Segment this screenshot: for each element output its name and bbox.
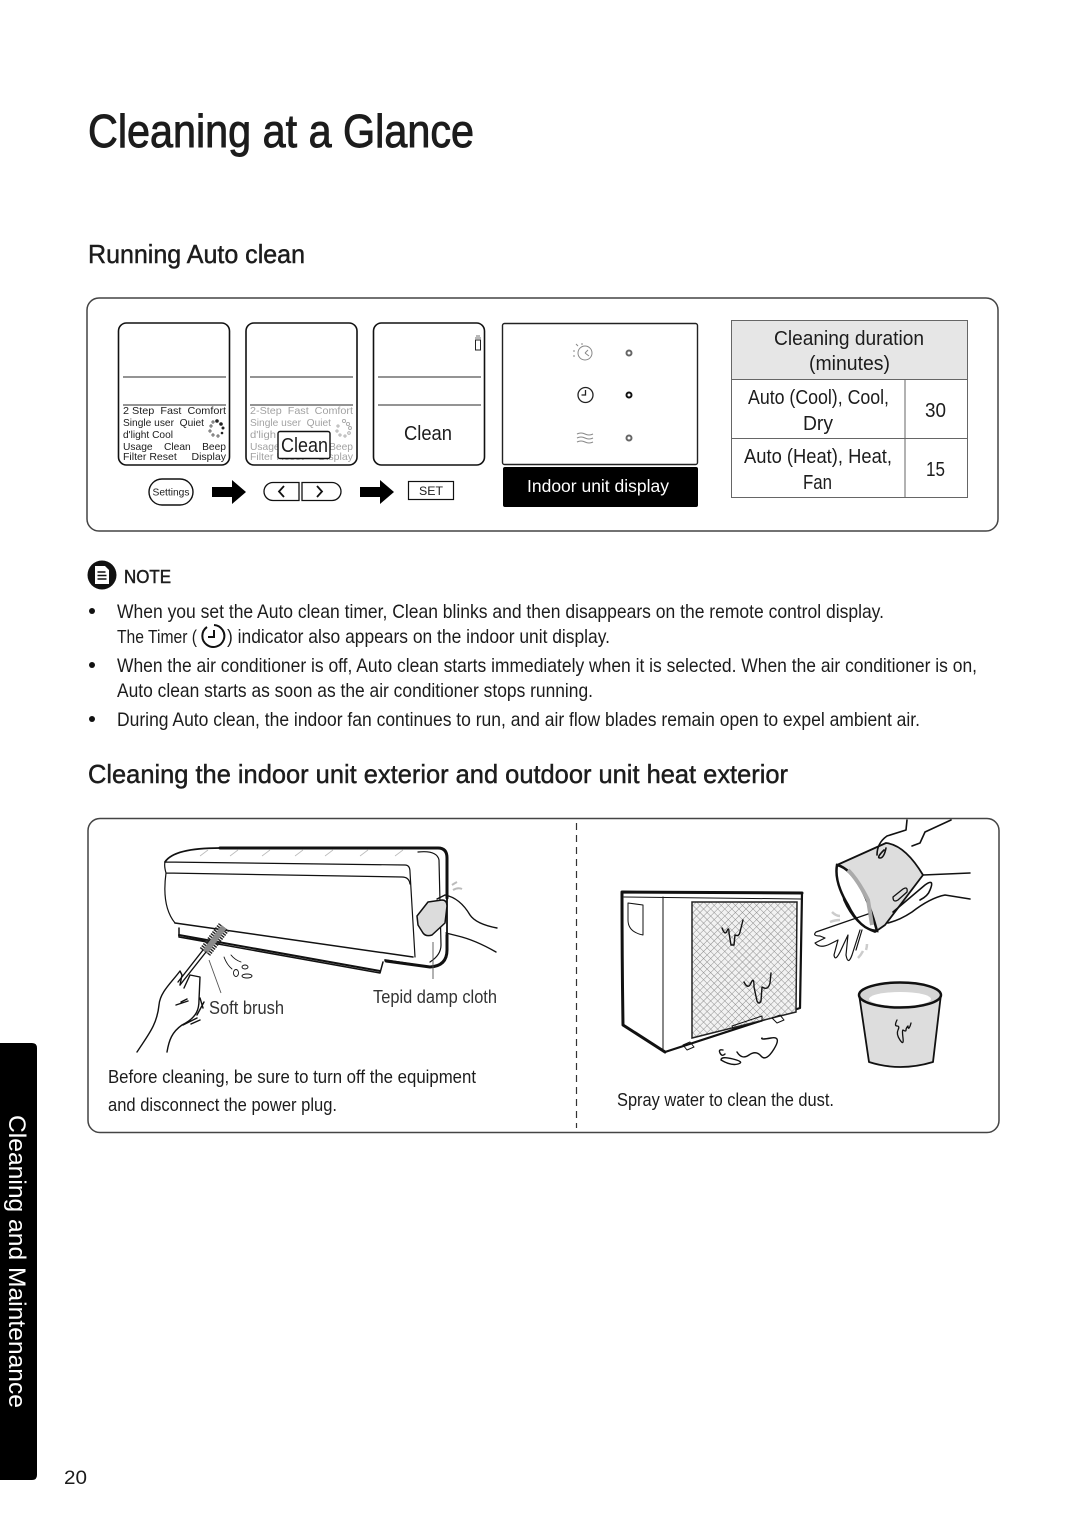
- illustration: water bucket: [859, 982, 941, 1067]
- illustration: outdoor unit: [622, 892, 802, 1064]
- right hand with cloth: [437, 895, 497, 952]
- remote display 1: d'light Cool: [123, 429, 173, 441]
- icon: timer indicator: [578, 388, 593, 402]
- brush: [178, 927, 224, 985]
- heading: running auto clean: Running Auto clean: [88, 239, 305, 269]
- remote display 2: [246, 323, 357, 465]
- remote display 1: Single user Quiet: [123, 417, 204, 429]
- drips: [719, 920, 777, 1064]
- table: cleaning duration: 15: [926, 459, 945, 481]
- table: cleaning duration: Cleaning duration: [774, 328, 924, 350]
- remote display 2: 2-Step Fast Comfort: [250, 405, 353, 417]
- left right buttons: [264, 482, 341, 500]
- note heading: [88, 560, 171, 590]
- dust: [224, 955, 252, 978]
- side tab: [0, 1043, 37, 1480]
- icon: note: [88, 560, 116, 590]
- caption: before cleaning: [108, 1067, 476, 1115]
- table: cleaning duration: Fan: [803, 472, 832, 494]
- remote display 1: 2 Step Fast Comfort: [123, 405, 226, 417]
- note heading: NOTE: [124, 566, 171, 587]
- table: cleaning duration: Auto (Heat), Heat,: [744, 446, 892, 468]
- heading: cleaning exterior: Cleaning the indoor unit exterior and outdoor unit heat exterior: [88, 759, 788, 789]
- icon: clean indicator: [573, 343, 592, 360]
- remote display 1: Usage Clean Beep: [123, 441, 226, 453]
- table: cleaning duration: Dry: [803, 413, 833, 435]
- vent blade: [175, 923, 413, 973]
- set button: [408, 482, 454, 500]
- caption: spray water: Spray water to clean the dust.: [617, 1090, 834, 1110]
- illustration: pouring bucket: [815, 820, 970, 960]
- panel: exterior cleaning: [88, 818, 999, 1132]
- label: indoor unit display: Indoor unit display: [527, 476, 669, 496]
- note text block: ) indicator also appears on the indoor unit display.: [227, 626, 610, 648]
- label: soft brush: Soft brush: [209, 997, 284, 1018]
- page number: 20: [64, 1468, 87, 1489]
- caption: before cleaning: Before cleaning, be sure to turn off the equipment: [108, 1067, 476, 1087]
- arrow: [212, 480, 246, 504]
- note text block: During Auto clean, the indoor fan continues to run, and air flow blades remain open to expel ambient air.: [117, 709, 920, 731]
- remote display 2: Usage Clean Beep: [250, 441, 353, 453]
- hands: [877, 820, 970, 923]
- note text block: The Timer (: [117, 627, 197, 647]
- icon: fan indicator: [577, 433, 593, 443]
- side tab: Cleaning and Maintenance: [3, 1115, 30, 1408]
- leader lines: [209, 942, 433, 993]
- table: cleaning duration: 30: [925, 400, 946, 422]
- arrow: [360, 480, 394, 504]
- title: Cleaning at a Glance: [88, 105, 474, 157]
- remote display 2: Filter Reset Display: [250, 451, 354, 463]
- illustration: indoor unit with brush and cloth: [137, 848, 497, 1052]
- note text block: When the air conditioner is off, Auto clean starts immediately when it is selected. When the air conditioner is on,: [117, 655, 977, 677]
- panel: running auto clean: [87, 298, 998, 531]
- set button: SET: [419, 484, 444, 498]
- indoor unit body: [165, 848, 447, 967]
- remote display 1: [118, 323, 230, 465]
- remote display 3: Clean: [404, 423, 452, 445]
- settings button: [149, 479, 193, 505]
- settings button: Settings: [152, 486, 190, 498]
- clean highlight box: Clean: [281, 435, 328, 457]
- label: indoor unit display: [503, 467, 698, 507]
- caption: before cleaning: and disconnect the power plug.: [108, 1095, 337, 1115]
- left hand: [137, 971, 204, 1052]
- icon: timer: [202, 625, 224, 647]
- remote display 1: Filter Reset Display: [123, 451, 227, 463]
- water splash: [815, 914, 868, 960]
- note text block: When you set the Auto clean timer, Clean blinks and then disappears on the remote control display.: [117, 601, 884, 623]
- note text block: [89, 601, 977, 731]
- note text block: Auto clean starts as soon as the air conditioner stops running.: [117, 680, 593, 702]
- remote display 2: d'ligh: [250, 429, 276, 441]
- table: cleaning duration: [732, 320, 968, 498]
- label: tepid damp cloth: Tepid damp cloth: [373, 986, 497, 1007]
- remote display 2: Single user Quiet: [250, 417, 331, 429]
- table: cleaning duration: (minutes): [809, 353, 890, 375]
- table: cleaning duration: Auto (Cool), Cool,: [748, 387, 889, 409]
- indoor unit display: [502, 324, 698, 464]
- remote display 3: [374, 323, 484, 465]
